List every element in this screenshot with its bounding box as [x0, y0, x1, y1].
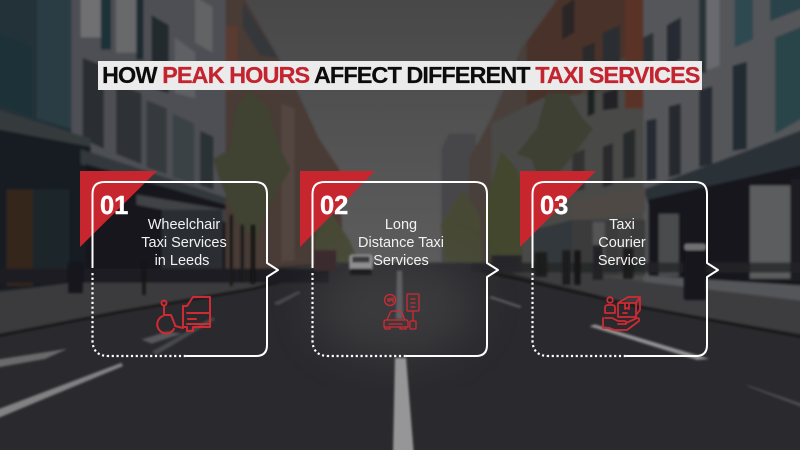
label: long distance taxi services: Services [373, 253, 429, 269]
panel: card 03 taxi courier [520, 171, 718, 356]
icon: wheelchair and taxi [157, 297, 210, 333]
red corner triangle 01 [80, 171, 157, 247]
red corner triangle 02 [300, 171, 375, 247]
card outline 01 [92, 182, 278, 356]
red corner triangle 03 [520, 171, 596, 247]
number 03: 03 [540, 192, 568, 220]
number 01: 01 [100, 192, 128, 220]
card outline 02 [312, 182, 498, 356]
icon: 24 hour taxi stop [384, 294, 419, 329]
label: wheelchair taxi services in leeds: Wheelchair [148, 217, 220, 233]
label: wheelchair taxi services in leeds: in Leeds [155, 253, 209, 269]
title: HOW PEAK HOURS AFFECT DIFFERENT TAXI SERVICES [102, 62, 699, 88]
label: taxi courier service: Courier [598, 235, 646, 251]
label: taxi courier service: Taxi [609, 217, 635, 233]
icon: parcel on hand [603, 297, 640, 330]
card outline 03 [532, 182, 718, 356]
label: wheelchair taxi services in leeds: Taxi Services [141, 235, 227, 251]
panel: card 02 long distance taxi [300, 171, 498, 356]
number 02: 02 [320, 192, 348, 220]
label: long distance taxi services: Distance Taxi [358, 235, 444, 251]
label: long distance taxi services: Long [385, 217, 417, 233]
panel: card 01 wheelchair taxi [80, 171, 278, 356]
label: taxi courier service: Service [598, 253, 646, 269]
